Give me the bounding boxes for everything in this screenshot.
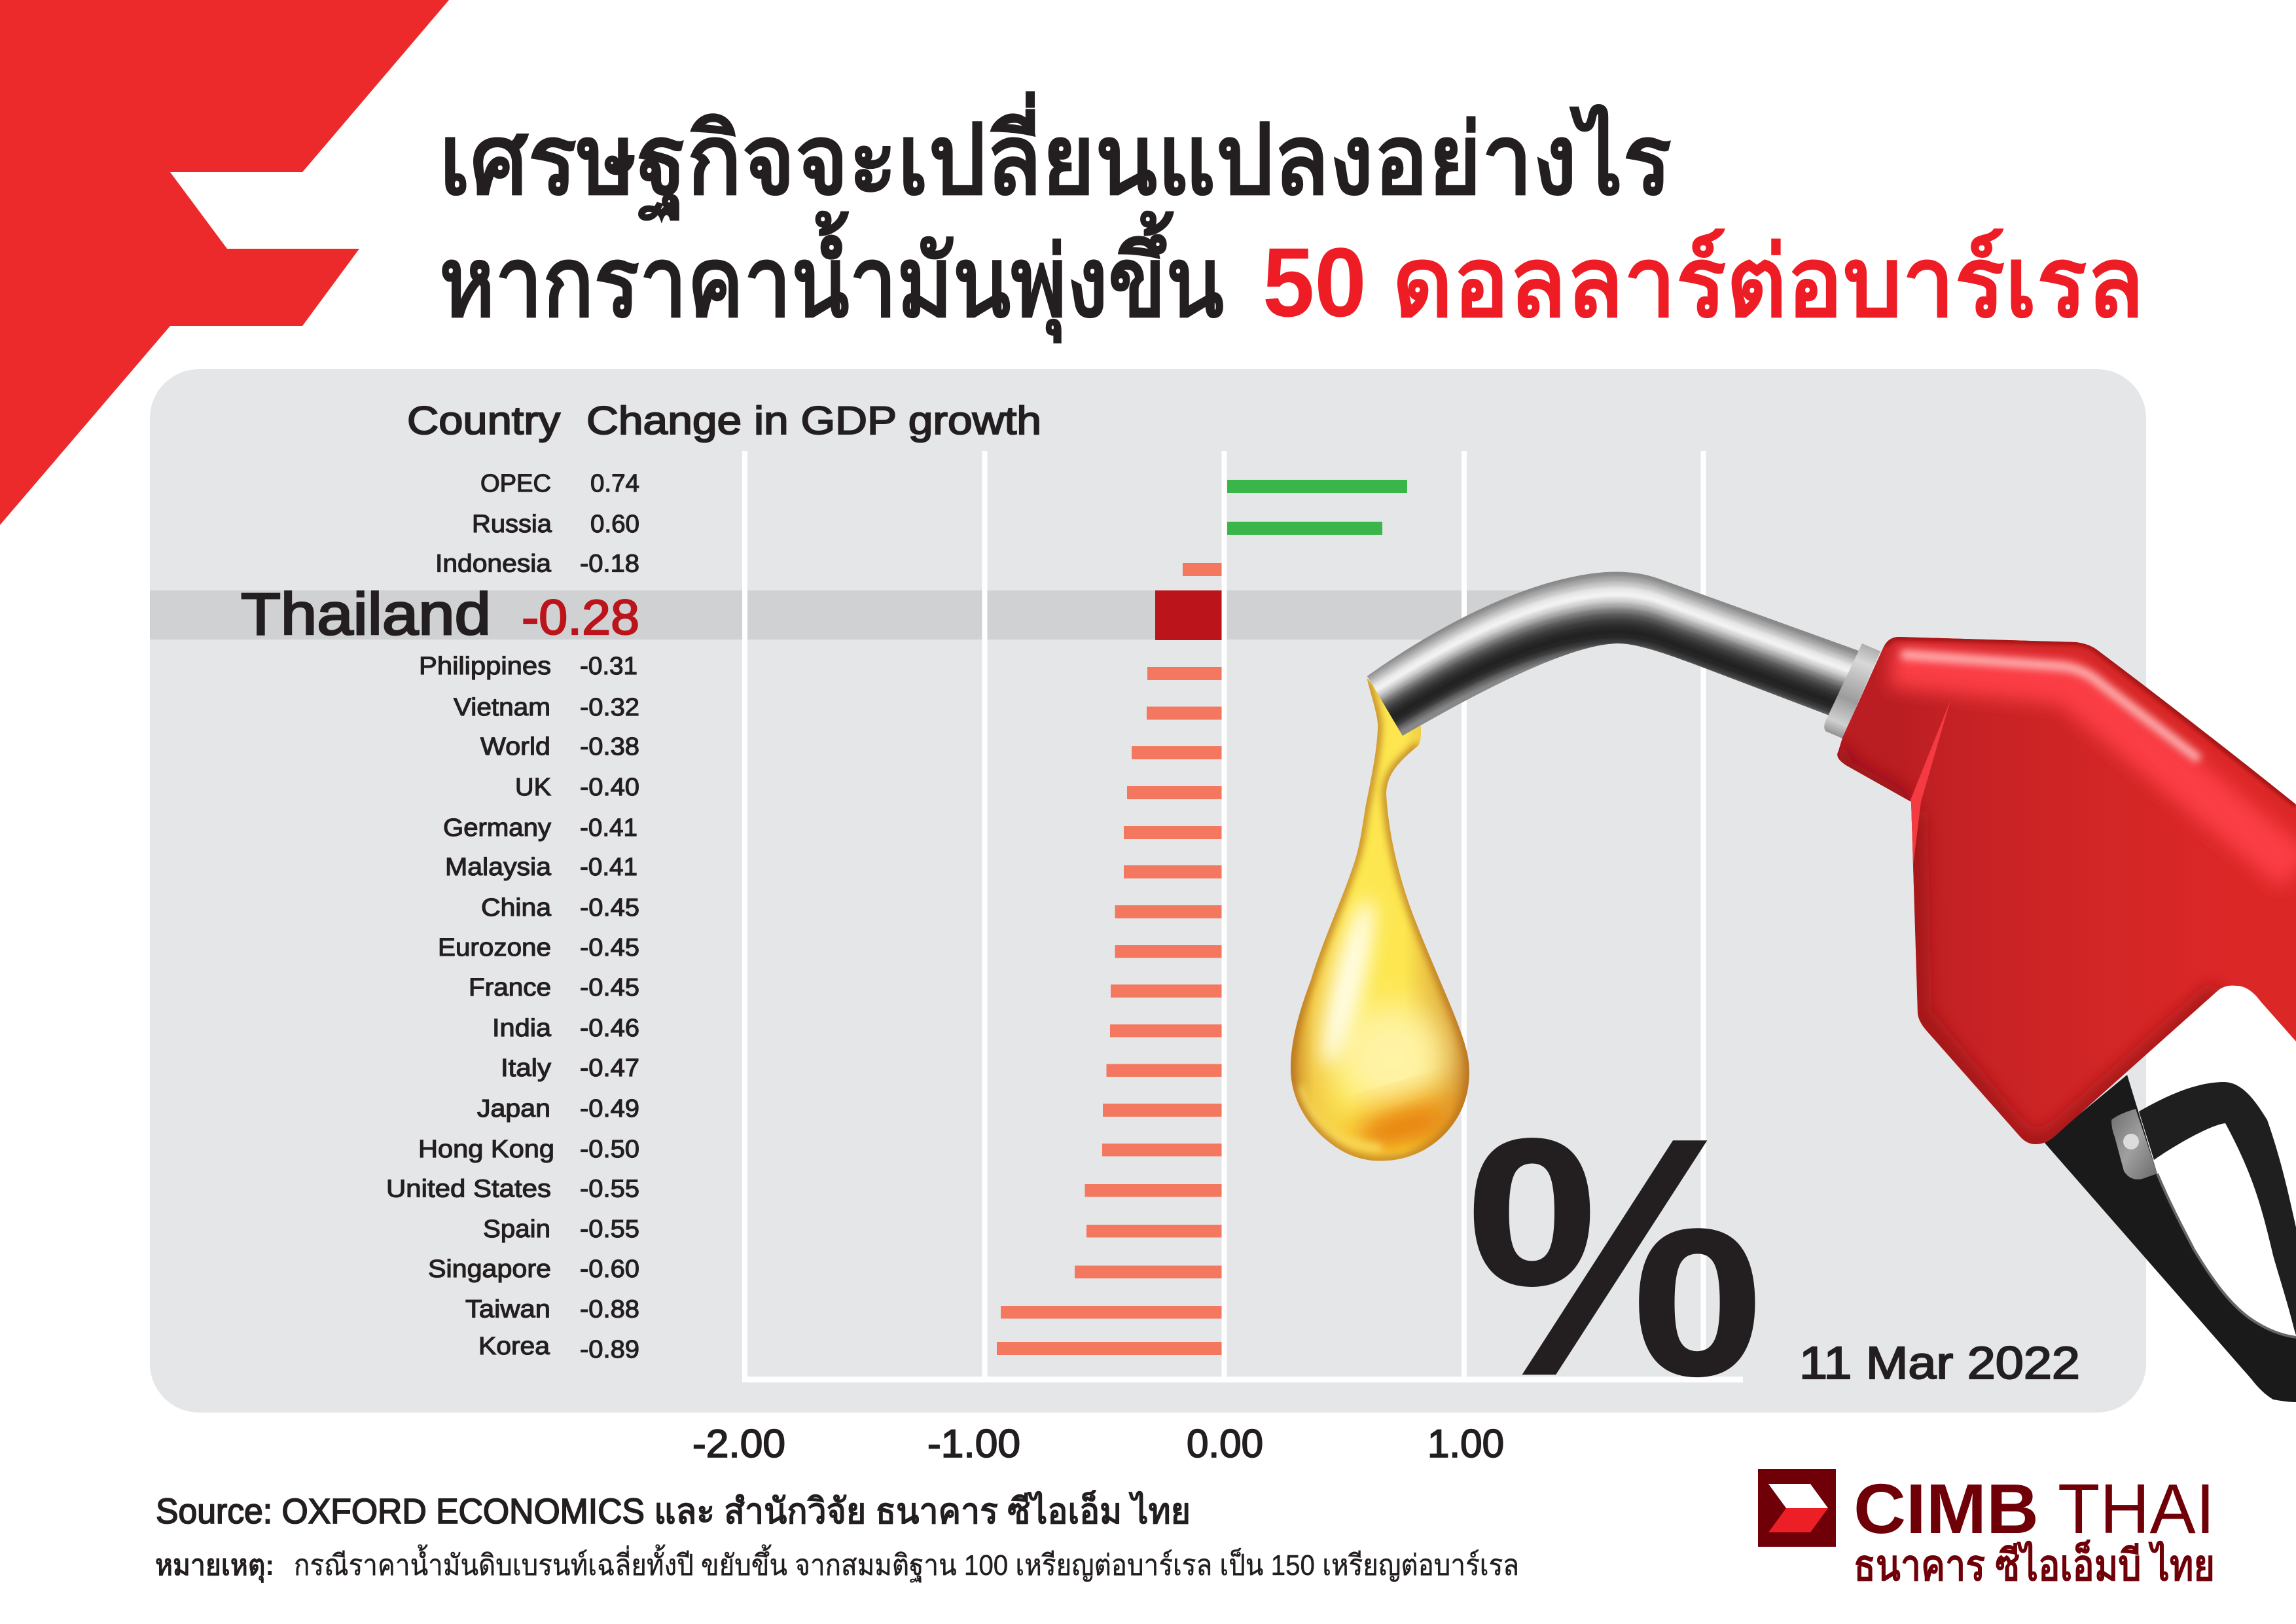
footnote: กรณีราคาน้ำมันดิบเบรนท์เฉลี่ยทั้งปี ขยับขึ้น จากสมมติฐาน 100 เหรียญต่อบาร์เรล เป็น 150 เหรียญต่อบาร์เรล [294, 1544, 1519, 1582]
row: Singapore [428, 1255, 639, 1283]
logo wordmark light: THAI [2058, 1469, 2215, 1548]
country and value labels [386, 470, 639, 1363]
percent symbol: % [1465, 1067, 1764, 1447]
bar: OPEC [1227, 480, 1407, 493]
row: Eurozone [438, 934, 639, 962]
row: France [469, 974, 639, 1001]
x axis labels: -1.00 [927, 1422, 1020, 1466]
row: China [481, 894, 639, 922]
bar: Vietnam [1147, 707, 1221, 720]
bar: Russia [1227, 522, 1382, 535]
bright upper band [1892, 664, 2296, 871]
row: Russia [472, 511, 639, 538]
row: Eurozone: -0.45 [580, 934, 639, 962]
row: Taiwan: Taiwan [465, 1296, 550, 1324]
row: Malaysia [445, 854, 637, 881]
row: Thailand highlight: Thailand [241, 582, 491, 647]
row: Korea [478, 1333, 639, 1363]
logo wordmark: CIMB [1854, 1469, 2039, 1548]
row: Spain [483, 1216, 639, 1243]
row: Germany: -0.41 [580, 814, 637, 842]
row: Vietnam: Vietnam [454, 694, 550, 721]
row: Malaysia: -0.41 [580, 854, 637, 881]
row: Spain: Spain [483, 1216, 550, 1243]
row: United States: -0.55 [580, 1176, 639, 1203]
row: Hong Kong [418, 1136, 639, 1163]
row: Indonesia: -0.18 [580, 550, 639, 577]
panel: chart background [150, 369, 2146, 1413]
row: Japan [477, 1095, 639, 1123]
bar: United States [1085, 1184, 1221, 1197]
row: Singapore: Singapore [428, 1255, 551, 1283]
row: UK [515, 774, 639, 801]
row: Hong Kong: -0.50 [580, 1136, 639, 1163]
row: Italy: Italy [501, 1055, 551, 1082]
column headings: Country [407, 399, 560, 442]
bar: Japan [1103, 1104, 1221, 1117]
red brand arrow shape [0, 0, 449, 525]
row: India [492, 1015, 639, 1042]
logo Thai name: ธนาคาร ซีไอเอ็มบี ไทย [1854, 1539, 2215, 1589]
bar: Taiwan [1001, 1306, 1221, 1318]
row: World [480, 733, 639, 761]
bar: Malaysia [1124, 865, 1221, 878]
bar: Philippines [1147, 667, 1221, 680]
row: World: World [480, 733, 550, 761]
lower edge shadow [1914, 812, 2218, 1144]
row: Italy: -0.47 [580, 1055, 639, 1082]
row: Philippines: Philippines [419, 653, 551, 680]
row: Thailand highlight [241, 582, 639, 647]
row: China: -0.45 [580, 894, 639, 922]
row: Philippines [419, 653, 637, 680]
bar: France [1111, 984, 1221, 998]
row: Indonesia [435, 550, 639, 577]
row: Vietnam: -0.32 [580, 694, 639, 721]
row: Thailand highlight: -0.28 [522, 590, 639, 645]
x axis labels: 1.00 [1427, 1422, 1504, 1466]
trigger guard [2139, 1082, 2296, 1335]
row: United States [386, 1176, 639, 1203]
date: 11 Mar 2022 [1799, 1337, 2080, 1388]
row: India: India [492, 1015, 552, 1042]
row: United States: United States [386, 1176, 551, 1203]
title [439, 91, 2144, 344]
row: UK: UK [515, 774, 551, 801]
bar: Thailand [1155, 590, 1221, 640]
row: Germany: Germany [443, 814, 551, 842]
nozzle spout [1367, 572, 1859, 736]
x axis labels: 0.00 [1187, 1422, 1263, 1466]
bar: Indonesia [1183, 563, 1221, 576]
bar: China [1115, 905, 1221, 918]
bar: India [1110, 1024, 1221, 1037]
row: Malaysia: Malaysia [445, 854, 552, 881]
row: Eurozone: Eurozone [438, 934, 551, 962]
bar: Germany [1124, 826, 1221, 839]
row: Germany [443, 814, 637, 842]
row: Japan: -0.49 [580, 1095, 639, 1123]
glossy highlight [1901, 655, 2199, 759]
bar: Spain [1086, 1225, 1221, 1237]
row: Korea: -0.89 [580, 1336, 639, 1363]
logo mark [1758, 1469, 1836, 1547]
nozzle collar [1824, 643, 1880, 738]
row: China: China [481, 894, 552, 922]
title: หากราคาน้ำมันพุ่งขึ้น [439, 210, 1224, 344]
row: Russia: 0.60 [590, 511, 639, 538]
bar: Hong Kong [1102, 1144, 1221, 1156]
bar chart [997, 480, 1407, 1355]
row: Singapore: -0.60 [580, 1255, 639, 1283]
nose shadow [1838, 746, 1911, 802]
footnote: หมายเหตุ: [155, 1549, 274, 1583]
nozzle handle and trigger [2045, 1075, 2296, 1402]
title: 50 ดอลลาร์ต่อบาร์เรล [1263, 227, 2144, 337]
row: Japan: Japan [477, 1095, 550, 1123]
rivet [2123, 1134, 2139, 1149]
footnote [155, 1544, 1519, 1583]
column headings [407, 399, 1041, 442]
row: Indonesia: Indonesia [435, 550, 552, 577]
row: UK: -0.40 [580, 774, 639, 801]
row: OPEC: 0.74 [590, 470, 639, 497]
title: เศรษฐกิจจะเปลี่ยนแปลงอย่างไร [439, 91, 1672, 224]
row: Korea: Korea [478, 1333, 550, 1360]
row: Taiwan [465, 1296, 639, 1324]
bar: Korea [997, 1342, 1221, 1355]
row: India: -0.46 [580, 1015, 639, 1042]
row: Hong Kong: Hong Kong [418, 1136, 554, 1163]
bar: World [1132, 746, 1221, 759]
row: Vietnam [454, 694, 639, 721]
bright sliver [1910, 700, 1950, 871]
CIMB Thai logo [1758, 1469, 2215, 1589]
bar: Italy [1106, 1064, 1221, 1077]
row: OPEC: OPEC [480, 470, 551, 497]
metal bracket [2111, 1109, 2157, 1180]
black grip [2045, 1075, 2296, 1402]
row: France: -0.45 [580, 974, 639, 1001]
row: France: France [469, 974, 551, 1001]
nozzle red body [1826, 628, 2296, 1152]
row: Spain: -0.55 [580, 1216, 639, 1243]
row: Italy [501, 1055, 639, 1082]
row: Philippines: -0.31 [580, 653, 637, 680]
Thailand highlight band [150, 590, 1573, 640]
row: Russia: Russia [472, 511, 552, 538]
row: World: -0.38 [580, 733, 639, 761]
x axis labels [692, 1422, 1504, 1466]
row: Taiwan: -0.88 [580, 1296, 639, 1324]
bar: Eurozone [1115, 945, 1221, 958]
top dark edge [1885, 637, 2296, 804]
bar: Singapore [1075, 1266, 1221, 1278]
grip highlight edge [2157, 1174, 2296, 1337]
source line: Source: OXFORD ECONOMICS และ สำนักวิจัย ธนาคาร ซีไอเอ็ม ไทย [156, 1490, 1191, 1531]
column headings: Change in GDP growth [586, 399, 1041, 442]
bar: UK [1127, 786, 1221, 799]
row: OPEC [480, 470, 639, 497]
icon: oil drop [1291, 677, 1469, 1161]
x axis labels: -2.00 [692, 1422, 785, 1466]
chart grid lines [742, 451, 1743, 1382]
